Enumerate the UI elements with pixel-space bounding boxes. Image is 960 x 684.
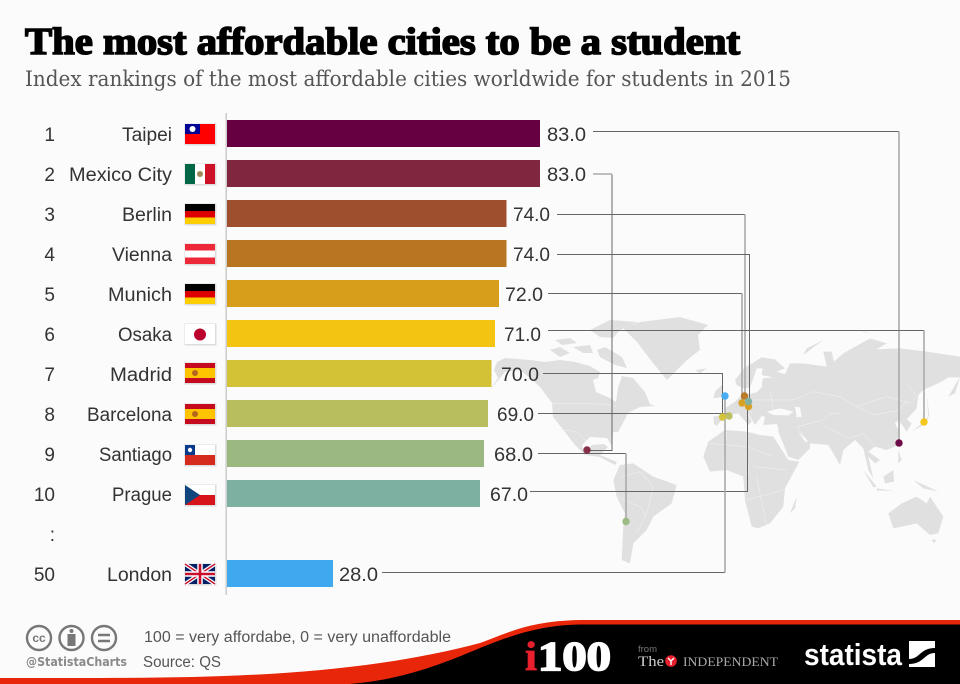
values: 68.0 — [494, 445, 533, 466]
ranks: 2 — [44, 165, 55, 186]
logo: The Independent: from — [638, 644, 657, 655]
icon: creative commons — [27, 626, 116, 650]
logo: i100: i — [525, 633, 537, 679]
flag: Spain Madrid — [184, 362, 216, 384]
ranks: 10 — [34, 485, 55, 506]
values: 83.0 — [547, 125, 586, 146]
flags — [184, 124, 216, 586]
city names — [69, 125, 173, 586]
city names: London — [107, 565, 172, 586]
ranks: 5 — [44, 285, 55, 306]
bar: Taipei — [227, 120, 540, 147]
logo: The Independent: INDEPENDENT — [683, 654, 778, 669]
ranks: 7 — [44, 365, 55, 386]
ranks: 8 — [44, 405, 55, 426]
flag: Germany Munich — [184, 284, 216, 306]
scale note: 100 = very affordabe, 0 = very unaffordable — [144, 629, 451, 646]
flag: United Kingdom — [184, 564, 216, 586]
Canadian Arctic islands — [550, 320, 638, 368]
flag: Germany Berlin — [184, 204, 216, 226]
Madagascar — [790, 497, 797, 513]
city names: Mexico City — [69, 165, 173, 186]
ranks: 3 — [44, 205, 55, 226]
city names: Vienna — [112, 245, 172, 266]
bar: Vienna — [227, 240, 506, 267]
statista handle: @StatistaCharts — [26, 655, 127, 669]
values: 72.0 — [505, 285, 543, 306]
footer band — [0, 620, 960, 684]
flag: Austria — [184, 244, 216, 266]
values: 28.0 — [339, 565, 378, 586]
Islands — [695, 328, 960, 543]
city names: Osaka — [118, 325, 172, 346]
logo: The Independent — [638, 644, 778, 670]
values — [339, 125, 586, 586]
icon: creative commons: cc — [32, 631, 46, 645]
title: The most affordable cities to be a student — [25, 21, 740, 63]
connector lines — [382, 132, 924, 572]
Country borders — [552, 383, 917, 533]
values: 74.0 — [513, 205, 550, 226]
ranks: 50 — [34, 565, 55, 586]
ranks: 4 — [44, 245, 55, 266]
bar: Madrid — [227, 360, 492, 387]
bar: Osaka — [227, 320, 495, 347]
ranks: 1 — [44, 125, 55, 146]
flag: Spain Barcelona — [184, 404, 216, 426]
values: 70.0 — [501, 365, 539, 386]
Greenland — [623, 317, 708, 380]
subtitle: Index rankings of the most affordable cities worldwide for students in 2015 — [25, 67, 791, 91]
world map — [490, 317, 960, 563]
city names: Berlin — [122, 205, 172, 226]
ranks: 9 — [44, 445, 55, 466]
source: Source: QS — [143, 654, 221, 671]
city location dots — [583, 392, 928, 525]
ranks: 6 — [44, 325, 55, 346]
flag: Japan — [184, 324, 216, 346]
flag: Taiwan — [184, 124, 216, 146]
bar: Barcelona — [227, 400, 488, 427]
bar: Munich — [227, 280, 499, 307]
flag: Mexico — [184, 164, 216, 186]
city names: Barcelona — [87, 405, 172, 426]
bar: Mexico City — [227, 160, 540, 187]
bar chart — [227, 120, 540, 587]
logo: i100: 100 — [538, 633, 611, 679]
city names: Madrid — [110, 365, 172, 386]
values: 67.0 — [490, 485, 528, 506]
Eurasia — [713, 338, 960, 478]
values: 74.0 — [513, 245, 550, 266]
values: 83.0 — [547, 165, 586, 186]
city names: Prague — [112, 485, 172, 506]
city names: Santiago — [99, 445, 172, 466]
logo: statista: statista — [804, 637, 903, 672]
city names: Munich — [108, 285, 172, 306]
bar: Prague — [227, 480, 480, 507]
values: 71.0 — [504, 325, 541, 346]
bar: Berlin — [227, 200, 506, 227]
North America — [490, 358, 655, 465]
map in zoomed coordinates — [552, 328, 960, 563]
South America — [613, 463, 677, 563]
city names: Taipei — [122, 125, 172, 146]
ranks: : — [50, 525, 55, 546]
ranks — [34, 125, 55, 586]
bar: London — [227, 560, 333, 587]
Black Sea and Caspian — [767, 407, 808, 442]
logo: The Independent: The — [638, 654, 664, 670]
flag: Czech Republic — [184, 484, 216, 506]
axis line — [226, 113, 227, 595]
bar: Santiago — [227, 440, 484, 467]
flag: Chile — [184, 444, 216, 466]
values: 69.0 — [497, 405, 534, 426]
Africa — [703, 430, 799, 528]
